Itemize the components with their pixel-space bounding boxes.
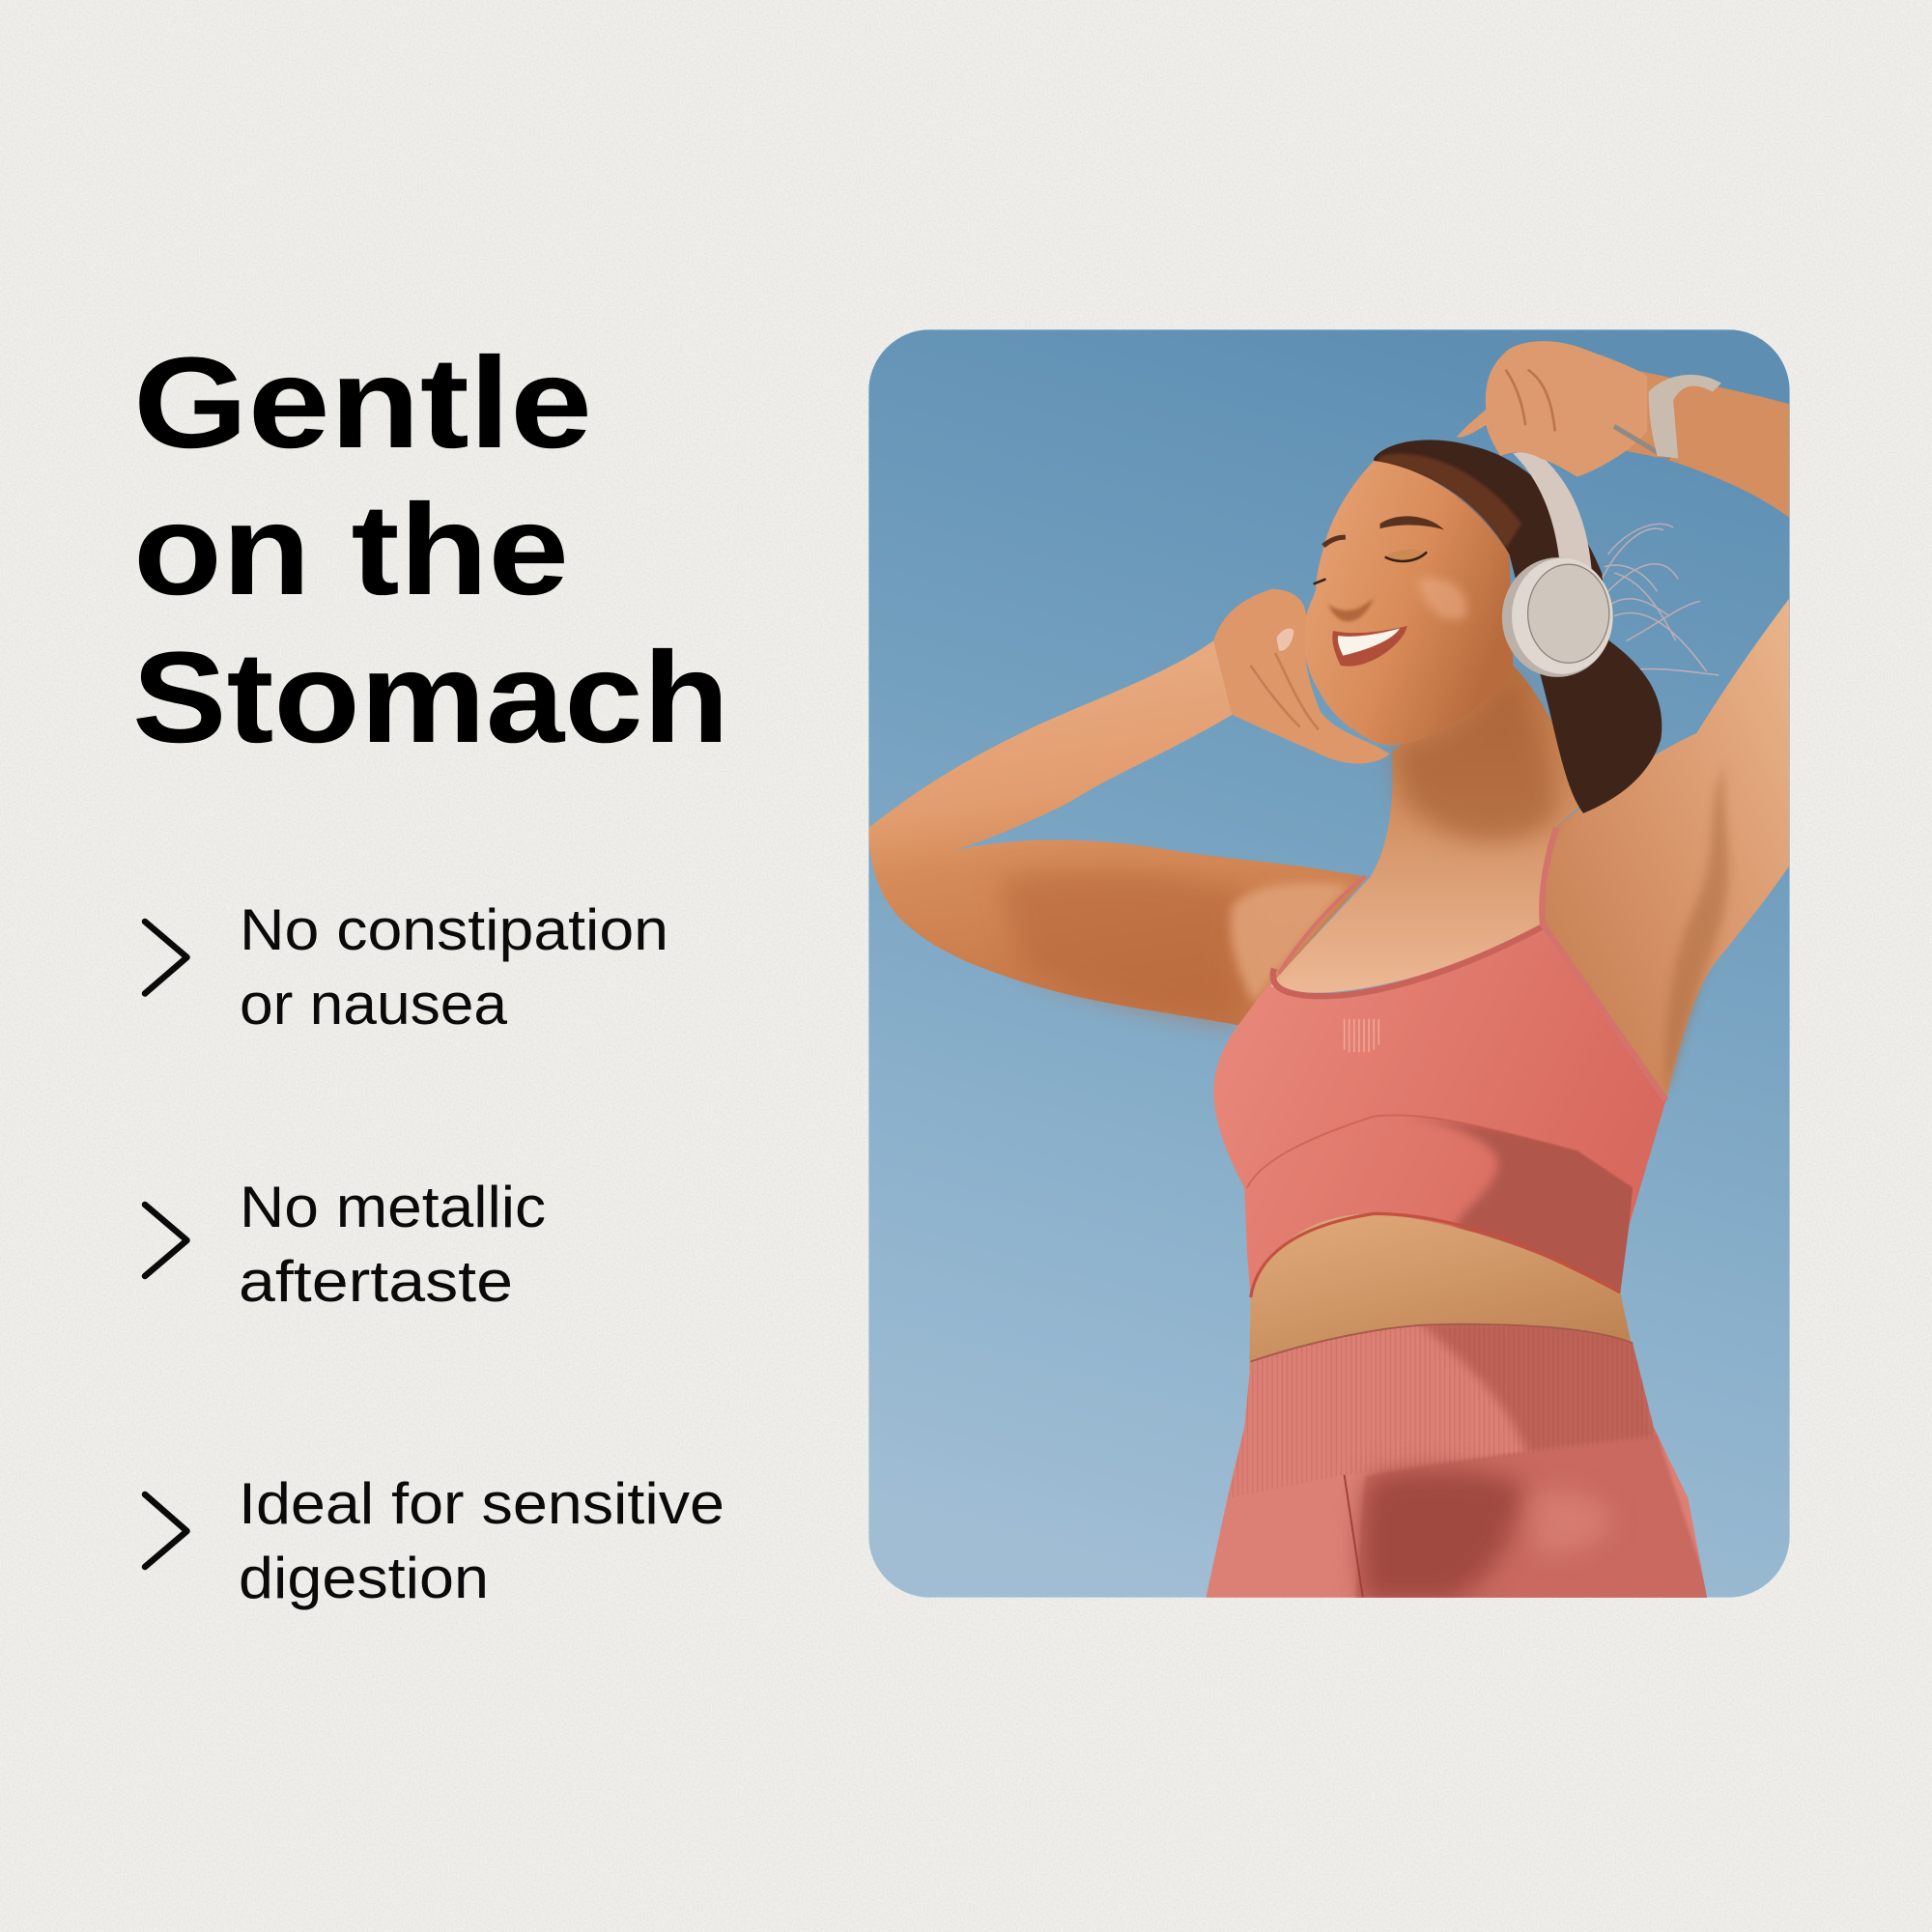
list item: no metallic aftertaste bbox=[145, 1175, 546, 1314]
front seam bbox=[1345, 1475, 1363, 1597]
nose shadow bbox=[1328, 598, 1374, 621]
shoulder highlight bbox=[1231, 883, 1350, 1005]
raised hand bbox=[1457, 341, 1647, 477]
heading: on the bbox=[133, 478, 569, 622]
finger creases bbox=[1251, 653, 1319, 729]
eyelid bbox=[1387, 550, 1427, 563]
raised arm bbox=[1540, 599, 1789, 1103]
bra body bbox=[1213, 926, 1665, 1297]
neck and chest bbox=[1269, 666, 1585, 993]
list item: no constipation bbox=[145, 897, 668, 1037]
front arm bbox=[868, 640, 1368, 1025]
face bbox=[1304, 461, 1513, 745]
midriff bbox=[1249, 1213, 1633, 1370]
right strap bbox=[1542, 828, 1665, 1100]
benefit list bbox=[145, 897, 724, 1610]
cheek highlight bbox=[1417, 578, 1467, 620]
smartwatch bbox=[1614, 375, 1721, 460]
face features bbox=[1314, 516, 1467, 667]
upper arm shadow bbox=[998, 870, 1251, 1025]
waistband top edge bbox=[1251, 1324, 1633, 1361]
left strap bbox=[1279, 876, 1365, 974]
fingernail bbox=[1276, 629, 1293, 651]
rib texture bbox=[1229, 1324, 1658, 1498]
text: no constipation or nausea: No constipation bbox=[240, 897, 668, 962]
hair bbox=[1374, 440, 1662, 813]
heading bbox=[132, 331, 729, 770]
bra logo bbox=[1345, 1019, 1378, 1052]
mouth bbox=[1332, 626, 1407, 667]
icon: chevron bbox=[145, 1205, 187, 1276]
arm muscle shading bbox=[1665, 764, 1728, 1096]
text: ideal for sensitive digestion: digestion bbox=[239, 1546, 489, 1610]
hand shading bbox=[1506, 370, 1555, 431]
text: ideal for sensitive digestion: Ideal for sensitive bbox=[239, 1471, 724, 1536]
hair highlights bbox=[1378, 454, 1521, 549]
icon: chevron bbox=[145, 922, 187, 993]
heading: Gentle bbox=[133, 331, 592, 475]
raised forearm bbox=[1627, 370, 1789, 518]
neckline trim bbox=[1273, 926, 1543, 996]
text: no constipation or nausea: or nausea bbox=[240, 972, 508, 1037]
sky bbox=[868, 329, 1790, 1598]
leggings shadows bbox=[1355, 1319, 1713, 1602]
neck shadow bbox=[1395, 671, 1556, 841]
icon: chevron bbox=[145, 1494, 187, 1567]
crop top bbox=[1213, 828, 1665, 1306]
band hem line bbox=[1251, 1213, 1620, 1297]
photo panel: woman with headphones against sky bbox=[868, 329, 1790, 1602]
leggings bbox=[1205, 1319, 1713, 1602]
teeth bbox=[1338, 629, 1400, 656]
hair wisps bbox=[1602, 524, 1719, 675]
hand at face bbox=[1213, 589, 1390, 764]
brow bbox=[1380, 516, 1444, 529]
list item: ideal for sensitive digestion bbox=[145, 1471, 724, 1610]
ear cup bbox=[1502, 557, 1613, 677]
underbust seam bbox=[1247, 1115, 1633, 1188]
text: no metallic aftertaste: aftertaste bbox=[239, 1249, 513, 1314]
band shadow bbox=[1426, 1119, 1633, 1291]
headband bbox=[1513, 450, 1592, 573]
text: no metallic aftertaste: No metallic bbox=[240, 1175, 546, 1239]
heading: Stomach bbox=[132, 626, 729, 770]
